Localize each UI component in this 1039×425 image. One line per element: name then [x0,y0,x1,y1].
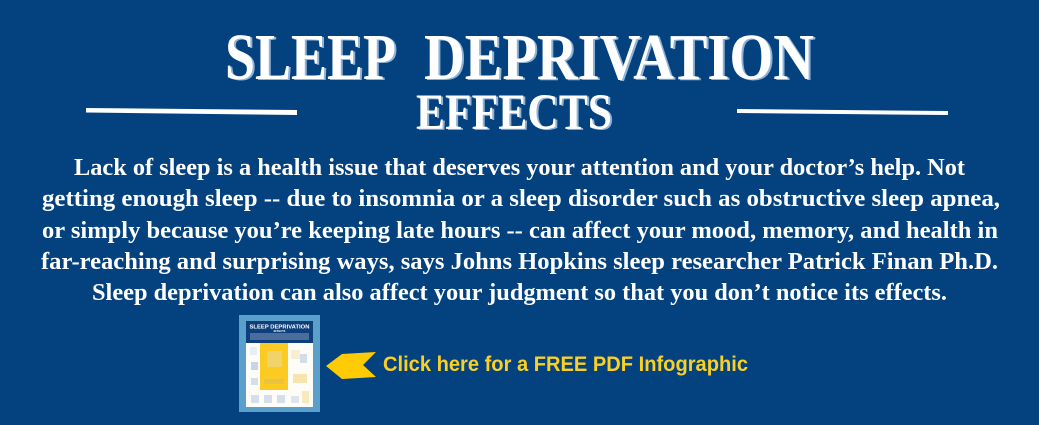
body text: Sleep deprivation can also affect your judgment so that you don’t notice its effects. [92,280,947,306]
subtitle: EFFECTS [416,85,612,141]
body text: far-reaching and surprising ways, says Johns Hopkins sleep researcher Patrick Finan Ph.D. [41,249,998,275]
title: SLEEP [227,22,398,95]
subtitle: EFFECTS [418,86,614,142]
infographic thumbnail [239,315,320,412]
title [225,21,816,95]
infographic thumbnail: SLEEP DEPRIVATION [250,324,310,330]
arrow pointing to thumbnail [326,352,376,379]
title: DEPRIVATION [424,21,814,94]
title: DEPRIVATION [426,22,816,95]
right divider line [737,109,948,115]
infographic thumbnail: EFFECTS [274,329,286,333]
body text: Lack of sleep is a health issue that deserves your attention and your doctor’s help. Not [74,155,965,181]
call to action link: Click here for a FREE PDF Infographic [383,353,748,376]
title: SLEEP [225,21,396,94]
body text: getting enough sleep -- due to insomnia or a sleep disorder such as obstructive sleep apnea, [42,186,1000,212]
body text [41,155,1000,306]
body text: or simply because you’re keeping late hours -- can affect your mood, memory, and health in [42,218,998,244]
left divider line [86,108,297,115]
